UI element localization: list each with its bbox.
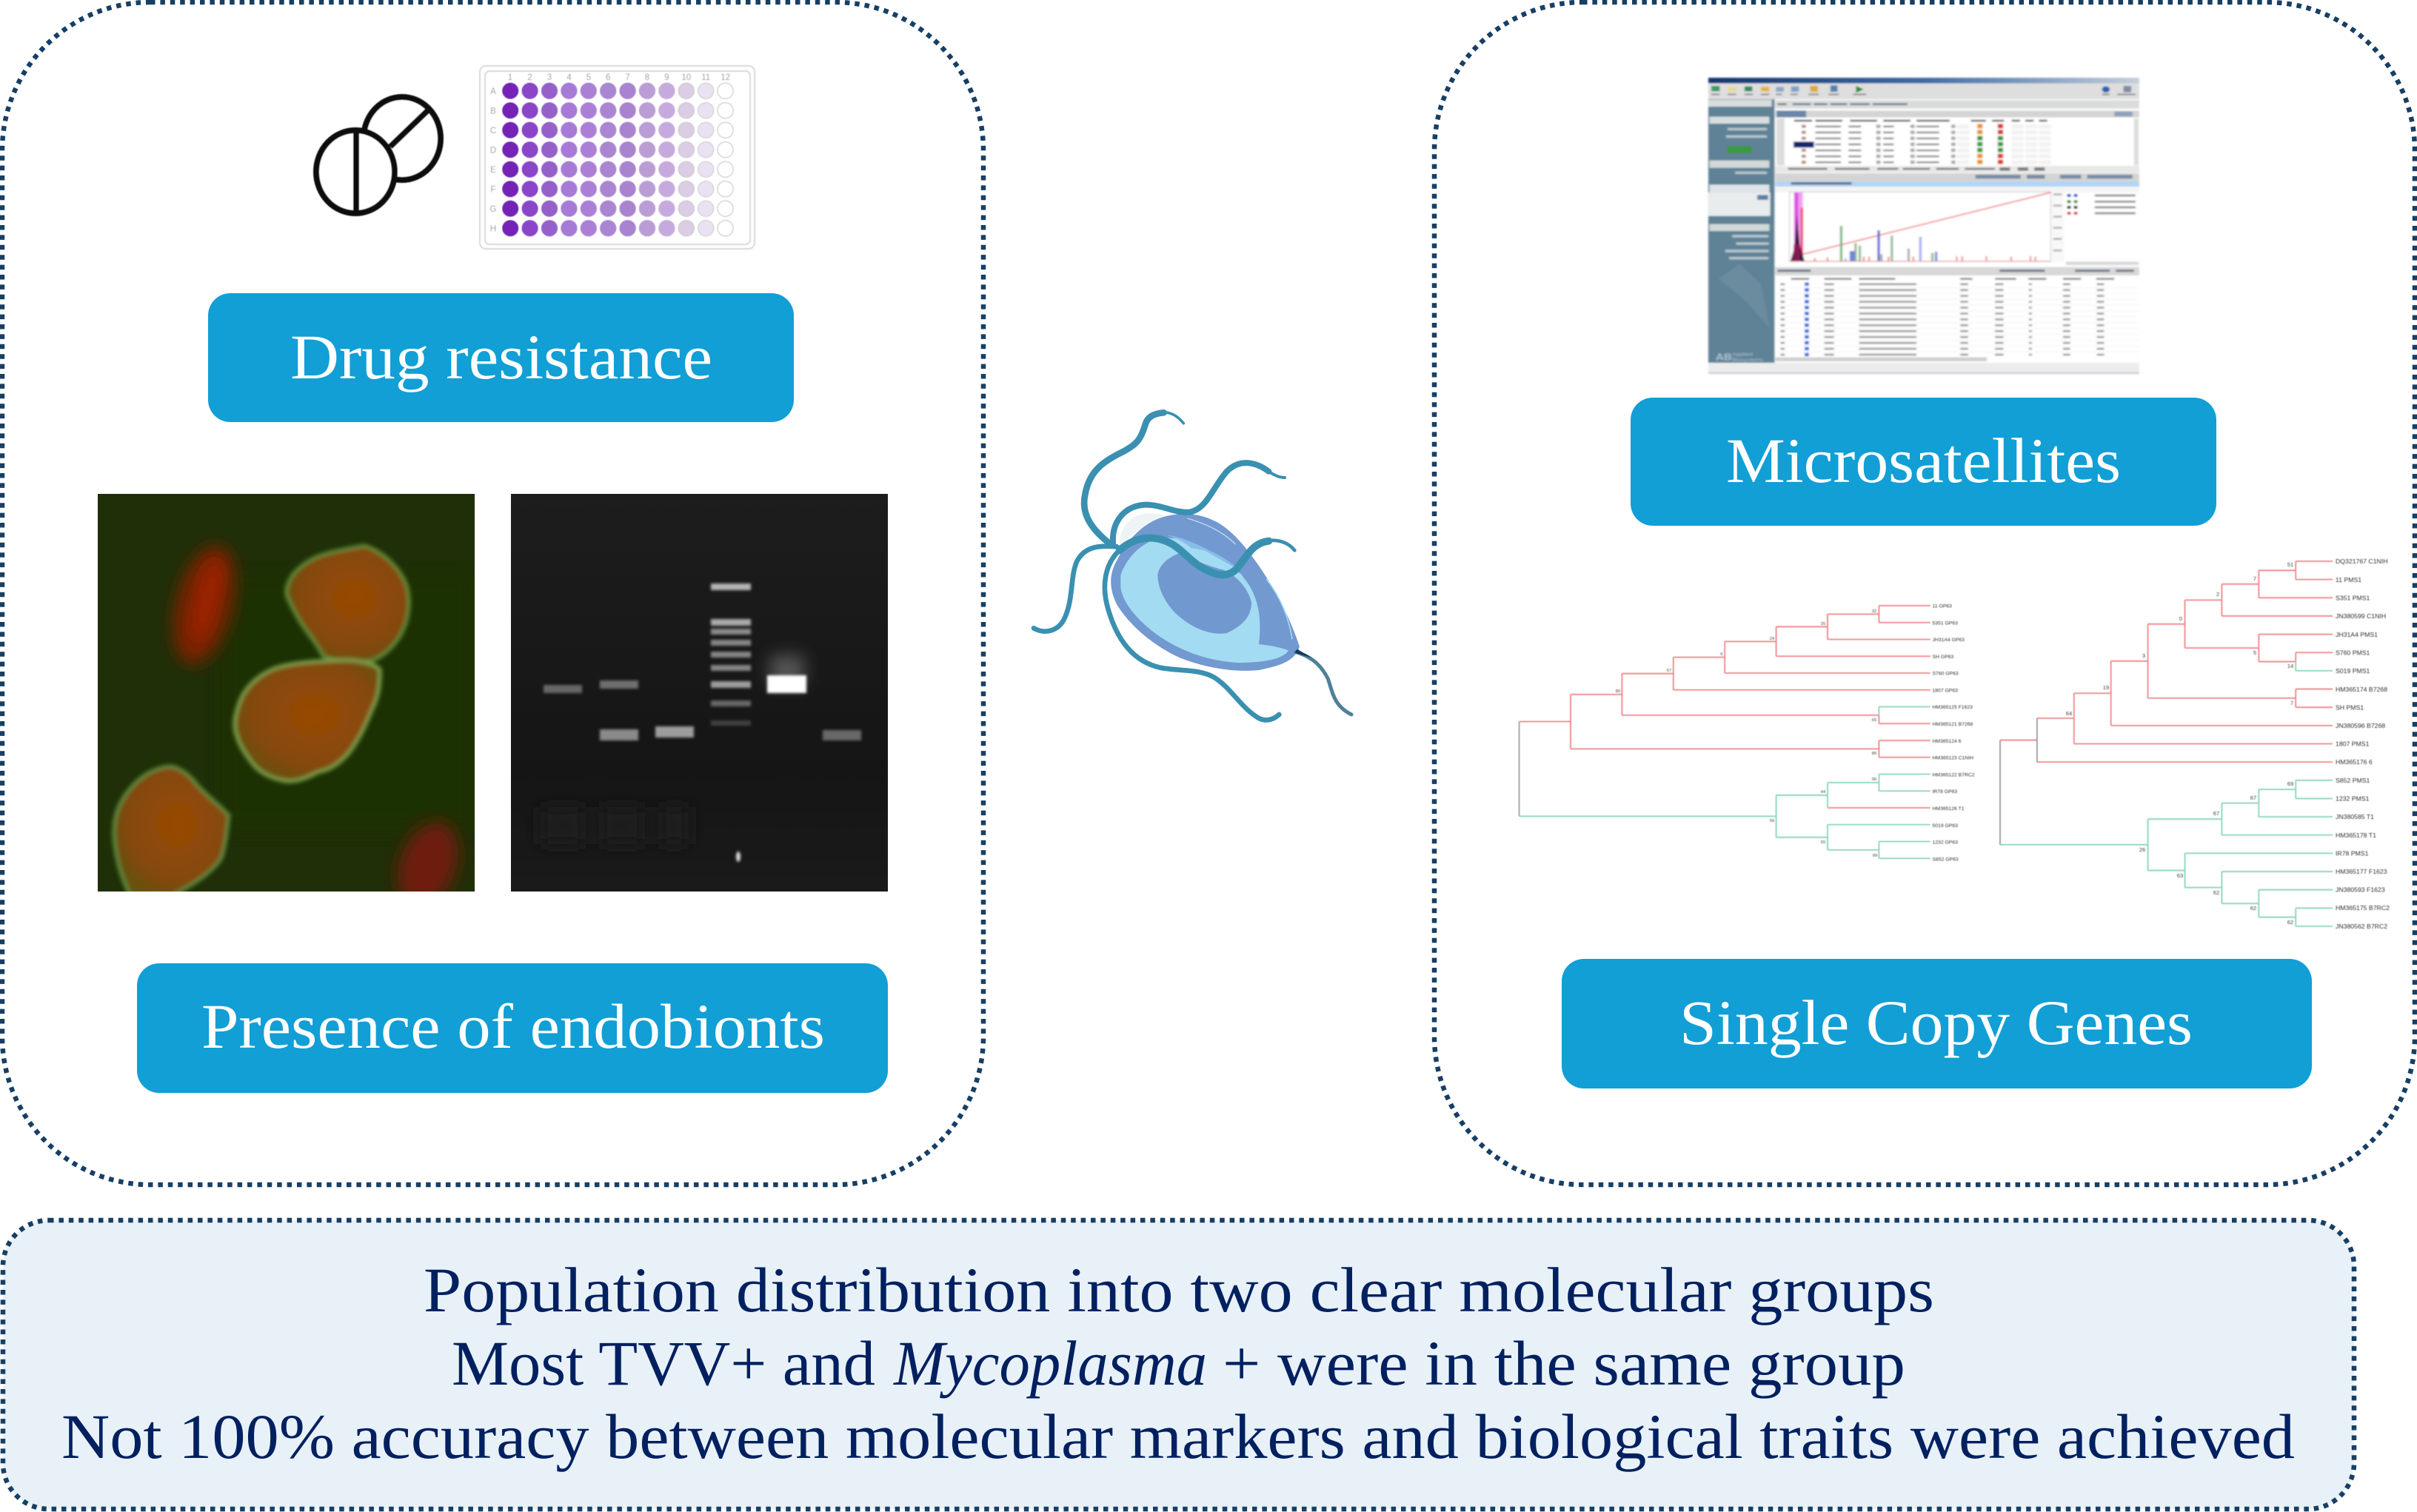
chart: GP63 phylogenetic tree: 25 xyxy=(1821,622,1825,626)
chart: GP63 phylogenetic tree: HM365126 T1 xyxy=(1933,806,1965,812)
chart: GP63 phylogenetic tree: 1232 GP63 xyxy=(1933,840,1958,846)
chart: 96-well drug resistance plate: D xyxy=(490,147,496,155)
chart: PMS1 phylogenetic tree: HM365177 F1623 xyxy=(2336,868,2387,875)
chart: PMS1 phylogenetic tree: 62 xyxy=(2287,919,2293,926)
panel: biological traits xyxy=(2,2,983,1185)
chart: PMS1 phylogenetic tree: 64 xyxy=(2066,710,2072,717)
chart: GP63 phylogenetic tree: 11 GP63 xyxy=(1933,604,1952,609)
chart: 96-well drug resistance plate: 10 xyxy=(681,73,691,82)
chart: PMS1 phylogenetic tree: 14 xyxy=(2287,663,2293,669)
chart: PMS1 phylogenetic tree: 69 xyxy=(2287,780,2293,787)
summary line 1: Population distribution into two clear molecular groups xyxy=(424,1254,1934,1325)
button: Presence of endobionts: Presence of endobionts xyxy=(201,991,825,1062)
chart: GP63 phylogenetic tree: 5019 GP63 xyxy=(1933,823,1958,829)
chart: GP63 phylogenetic tree: 67 xyxy=(1667,669,1671,673)
chart: 96-well drug resistance plate: 5 xyxy=(586,73,591,82)
plot xyxy=(1790,192,2051,261)
chart: GP63 phylogenetic tree: 32 xyxy=(1872,609,1876,614)
image: GeneMapper microsatellite software screenshot: Applied xyxy=(1733,351,1753,357)
chart: 96-well drug resistance plate: H xyxy=(490,225,496,234)
image: GeneMapper microsatellite software screenshot xyxy=(1708,78,2139,374)
chart: PMS1 phylogenetic tree: 0 xyxy=(2179,615,2182,622)
chart: GP63 phylogenetic tree xyxy=(1520,604,1975,862)
chart: GP63 phylogenetic tree: 80 xyxy=(1616,689,1620,694)
chart: 96-well drug resistance plate: 2 xyxy=(527,73,532,82)
chart: 96-well drug resistance plate: 3 xyxy=(547,73,552,82)
chart: GP63 phylogenetic tree: 86 xyxy=(1872,752,1876,756)
chart: PMS1 phylogenetic tree: 63 xyxy=(2177,872,2183,879)
summary line 2 xyxy=(452,1328,1905,1399)
chart: PMS1 phylogenetic tree: 1232 PMS1 xyxy=(2336,795,2370,803)
button: Presence of endobionts xyxy=(137,963,888,1093)
chart: PMS1 phylogenetic tree: 67 xyxy=(2213,810,2219,817)
chart: GP63 phylogenetic tree: HM365125 F1623 xyxy=(1933,705,1973,710)
chart: PMS1 phylogenetic tree: DQ321767 C1NIH xyxy=(2336,558,2388,565)
chart: PMS1 phylogenetic tree: S760 PMS1 xyxy=(2336,649,2370,656)
image: GeneMapper microsatellite software screenshot: Biosystems xyxy=(1733,357,1764,363)
chart: GP63 phylogenetic tree: 6 xyxy=(1720,652,1723,657)
chart: GP63 phylogenetic tree: HM365124 6 xyxy=(1933,739,1962,744)
chart: PMS1 phylogenetic tree: 62 xyxy=(2250,905,2256,911)
chart: GP63 phylogenetic tree: S760 GP63 xyxy=(1933,671,1959,677)
chart: 96-well drug resistance plate: C xyxy=(490,127,496,136)
summary line 2: + were in the same group xyxy=(1223,1328,1905,1399)
chart: GP63 phylogenetic tree: 56 xyxy=(1770,819,1774,823)
chart: GP63 phylogenetic tree: HM365122 B7RC2 xyxy=(1933,773,1975,777)
right side xyxy=(1775,99,2139,363)
chart: PMS1 phylogenetic tree: 26 xyxy=(2139,846,2145,853)
chart: 96-well drug resistance plate: B xyxy=(490,107,496,116)
chart: PMS1 phylogenetic tree: 11 PMS1 xyxy=(2336,576,2361,583)
chart: GP63 phylogenetic tree: HM365121 B7268 xyxy=(1933,722,1973,727)
chart: GP63 phylogenetic tree: 5351 GP63 xyxy=(1933,620,1958,626)
chart: 96-well drug resistance plate: 1 xyxy=(508,73,512,82)
chart: 96-well drug resistance plate: F xyxy=(490,185,496,194)
chart: GP63 phylogenetic tree: 24 xyxy=(1770,637,1775,641)
chart: PMS1 phylogenetic tree: 2 xyxy=(2216,591,2219,598)
summary line 3: Not 100% accuracy between molecular markers and biological traits were achieved xyxy=(61,1401,2295,1472)
chart: GP63 phylogenetic tree: IR78 GP63 xyxy=(1933,789,1957,795)
chart: PMS1 phylogenetic tree: HM365174 B7268 xyxy=(2336,686,2387,693)
chart: PMS1 phylogenetic tree: HM365176 6 xyxy=(2336,758,2373,766)
summary box xyxy=(3,1220,2354,1509)
chart: 96-well drug resistance plate: 7 xyxy=(625,73,630,82)
chart: PMS1 phylogenetic tree: JN380585 T1 xyxy=(2336,813,2374,820)
chart: PMS1 phylogenetic tree: HM365178 T1 xyxy=(2336,832,2376,839)
chart: 96-well drug resistance plate: A xyxy=(490,87,496,96)
chart: GP63 phylogenetic tree: 96 xyxy=(1872,777,1876,782)
chart: PMS1 phylogenetic tree: 62 xyxy=(2213,889,2219,896)
chart: 96-well drug resistance plate: 12 xyxy=(721,73,730,82)
button: Microsatellites: Microsatellites xyxy=(1726,425,2121,496)
chart: 96-well drug resistance plate: 9 xyxy=(664,73,669,82)
chart: PMS1 phylogenetic tree: IR78 PMS1 xyxy=(2336,850,2369,857)
chart: 96-well drug resistance plate: 11 xyxy=(701,73,710,82)
chart: PMS1 phylogenetic tree: S351 PMS1 xyxy=(2336,594,2370,601)
chart: PMS1 phylogenetic tree: 67 xyxy=(2250,795,2256,801)
chart: GP63 phylogenetic tree: S852 GP63 xyxy=(1933,857,1959,862)
chart: PMS1 phylogenetic tree: 19 xyxy=(2103,684,2109,691)
summary line 2: Mycoplasma xyxy=(892,1328,1207,1399)
button: Drug resistance: Drug resistance xyxy=(290,321,712,392)
chart: PMS1 phylogenetic tree: 51 xyxy=(2287,561,2293,568)
button: Drug resistance xyxy=(208,293,794,422)
sidebar xyxy=(1708,99,1775,363)
chart: PMS1 phylogenetic tree: JN380562 B7RC2 xyxy=(2336,923,2387,930)
chart: PMS1 phylogenetic tree: 1807 PMS1 xyxy=(2336,740,2370,748)
chart: GP63 phylogenetic tree: 44 xyxy=(1821,790,1826,795)
chart: PMS1 phylogenetic tree: S852 PMS1 xyxy=(2336,777,2370,784)
icon: pills xyxy=(316,97,441,213)
chart: GP63 phylogenetic tree: 1807 GP63 xyxy=(1933,689,1958,693)
image: GeneMapper microsatellite software screenshot: AB xyxy=(1716,352,1732,362)
panel: molecular markers xyxy=(1434,2,2415,1185)
chart: 96-well drug resistance plate xyxy=(480,66,755,249)
chart: 96-well drug resistance plate: 6 xyxy=(606,73,610,82)
chart: PMS1 phylogenetic tree: S019 PMS1 xyxy=(2336,667,2370,675)
button: Single Copy Genes: Single Copy Genes xyxy=(1679,987,2193,1058)
button: Microsatellites xyxy=(1631,398,2216,526)
chart: PMS1 phylogenetic tree: 7 xyxy=(2290,700,2293,706)
chart: GP63 phylogenetic tree: JH31A4 GP63 xyxy=(1933,638,1965,643)
chart: 96-well drug resistance plate: 4 xyxy=(566,73,572,82)
chart: PMS1 phylogenetic tree: 7 xyxy=(2253,575,2256,582)
chart: GP63 phylogenetic tree: 99 xyxy=(1873,854,1877,858)
chart: PMS1 phylogenetic tree: 5 xyxy=(2253,649,2256,656)
sizing table xyxy=(1776,267,2139,275)
chart: PMS1 phylogenetic tree xyxy=(2000,558,2390,930)
chart: 96-well drug resistance plate: G xyxy=(490,205,497,214)
image: fluorescence microscopy of trophozoites xyxy=(98,494,475,916)
button: Single Copy Genes xyxy=(1562,959,2312,1088)
chart: PMS1 phylogenetic tree: JN380599 C1NIH xyxy=(2336,612,2386,620)
chart: GP63 phylogenetic tree: HM365123 C1NIH xyxy=(1933,755,1973,761)
summary line 2: Most TVV+ and xyxy=(452,1328,875,1399)
image: PCR agarose gel xyxy=(511,494,888,892)
chart: PMS1 phylogenetic tree: 3 xyxy=(2142,652,2145,659)
chart: GP63 phylogenetic tree: 65 xyxy=(1872,718,1876,723)
chart: GP63 phylogenetic tree: SH GP63 xyxy=(1933,655,1953,660)
chart: PMS1 phylogenetic tree: JH31A4 PMS1 xyxy=(2336,631,2378,638)
chart: 96-well drug resistance plate: 8 xyxy=(645,73,649,82)
chart: PMS1 phylogenetic tree: SH PMS1 xyxy=(2336,703,2364,711)
chart: PMS1 phylogenetic tree: JN380596 B7268 xyxy=(2336,722,2385,729)
chart: GP63 phylogenetic tree: 55 xyxy=(1821,840,1825,845)
chart: PMS1 phylogenetic tree: JN380593 F1623 xyxy=(2336,886,2385,893)
chart: 96-well drug resistance plate: E xyxy=(490,166,496,175)
icon: Trichomonas parasite xyxy=(1034,412,1351,720)
chart: PMS1 phylogenetic tree: HM365175 B7RC2 xyxy=(2336,904,2390,911)
